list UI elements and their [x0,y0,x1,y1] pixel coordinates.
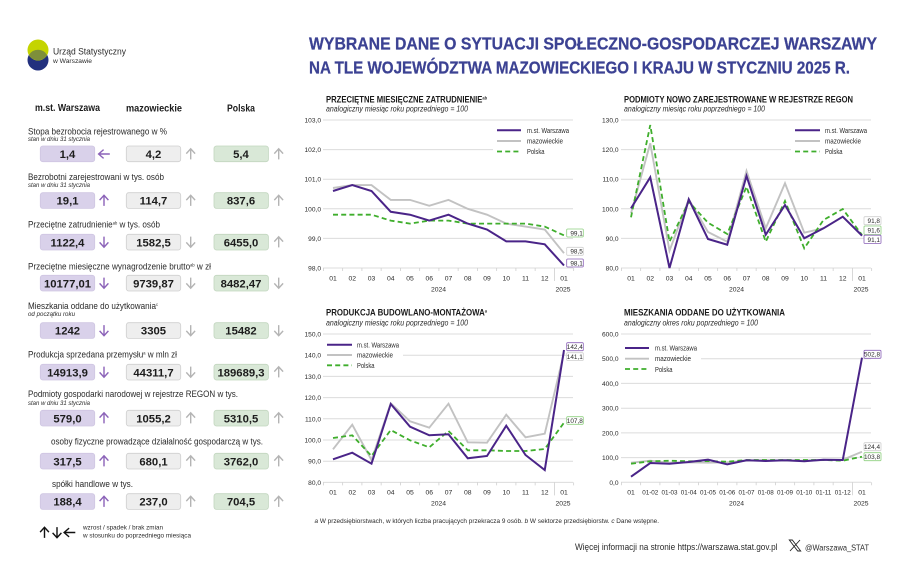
row: mieszkania oddane: c [156,302,159,307]
x axis labels: 10 [502,489,510,496]
row: bezrobotni zarejestrowani: stan w dniu 31 stycznia [28,182,91,189]
x axis labels: 01-11 [816,489,832,496]
end value labels: 91,1 [868,237,880,244]
x axis labels: 03 [666,276,673,283]
row: przeciętne zatrudnienie: 6455,0 [224,237,258,249]
legend: m.st. Warszawa [825,128,867,135]
y axis labels: 101,0 [304,177,321,184]
row: produkcja sprzedana: 14913,9 [47,367,88,379]
row: wynagrodzenie brutto: w zł [195,261,211,271]
x axis labels: 01-10 [796,489,813,496]
series lines [333,185,564,266]
row: produkcja sprzedana: 44311,7 [133,367,174,379]
chart heading: MIESZKANIA ODDANE DO UŻYTKOWANIA [624,307,786,317]
legend: Polska [825,149,843,156]
chart: produkcja budowlano-montażowa [304,307,583,508]
end value labels: 99,1 [570,230,583,237]
row: bezrobotni zarejestrowani: Bezrobotni zarejestrowani w tys. osób [28,172,164,182]
row: osoby fizyczne: 3762,0 [224,456,258,468]
y axis labels: 500,0 [602,356,619,363]
legend: mazowieckie [527,138,563,146]
y axis labels: 98,0 [308,266,321,272]
y axis labels: 100,0 [304,438,321,444]
chart heading [326,307,487,327]
chart: podmioty nowo zarejestrowane [602,94,881,294]
row: mieszkania oddane: Mieszkania oddane do użytkowania [28,301,170,311]
end value labels [567,229,583,267]
end value labels [864,350,881,461]
y axis labels: 103,0 [304,118,321,124]
y axis labels [304,118,321,272]
row: stopa bezrobocia: 4,2 [146,149,161,161]
x axis labels: 01 [329,276,337,283]
x axis labels: 11 [522,489,529,496]
row: osoby fizyczne: 680,1 [139,456,168,468]
y axis labels: 130,0 [602,118,619,124]
x axis labels: 01 [560,489,568,496]
end value labels: 98,5 [570,249,583,256]
x axis labels: 12 [541,276,549,283]
y axis labels: 80,0 [308,480,321,487]
x axis labels: 02 [348,489,356,496]
end value labels: 502,8 [864,352,880,359]
x axis labels: 09 [483,276,491,283]
row: stopa bezrobocia: 5,4 [233,149,250,161]
x axis labels: 10 [800,276,808,283]
row: mieszkania oddane: 15482 [225,326,257,338]
x axis labels: 2025 [853,287,869,294]
end value labels: 103,8 [864,454,880,461]
row: wynagrodzenie brutto: 9739,87 [133,278,174,290]
row: wynagrodzenie brutto: Przeciętne miesięczne wynagrodzenie brutto [28,261,207,271]
x axis labels: 01-12 [835,489,851,496]
title [309,34,877,78]
chart heading [326,94,487,114]
x axis labels: 01-02 [642,489,659,496]
x axis labels: 05 [406,276,414,283]
y axis labels [602,118,619,272]
legend: Polska [527,149,545,156]
x axis labels: 2024 [431,287,446,294]
y axis labels: 0,0 [609,480,619,487]
x axis labels: 01 [560,276,568,283]
x axis labels: 12 [541,489,549,496]
row: stopa bezrobocia: stan w dniu 31 stycznia [28,136,91,143]
chart heading: PRZECIĘTNE MIESIĘCZNE ZATRUDNIENIE [326,94,505,104]
x axis labels: 08 [464,489,472,496]
chart heading: PRODUKCJA BUDOWLANO-MONTAŻOWA [326,307,504,317]
logo: Urząd Statystyczny w Warszawie [28,40,126,70]
column headers: mazowieckie [126,104,183,114]
row: podmioty gospodarki narodowej: stan w dniu 31 stycznia [28,400,91,407]
row: wynagrodzenie brutto: 8482,47 [221,278,261,290]
chart heading: analogiczny miesiąc roku poprzedniego = 100 [326,105,469,114]
y axis labels: 90,0 [606,236,619,243]
x axis labels: 12 [839,276,847,283]
chart heading: a [485,308,487,313]
y axis labels [602,332,619,487]
x axis labels: 01 [858,489,866,496]
legend [791,124,871,158]
row: bezrobotni zarejestrowani: 19,1 [56,196,78,208]
footer link: Więcej informacji na stronie https://warszawa.stat.gov.pl [575,541,778,552]
chart heading: analogiczny miesiąc roku poprzedniego = 100 [624,105,766,114]
arrow legend: wzrost / spadek / brak zmian [82,525,163,532]
x axis labels [627,489,869,508]
legend: Polska [357,363,375,370]
x axis labels: 2024 [729,287,744,294]
column headers [35,103,255,114]
X handle: @Warszawa_STAT [805,542,870,552]
x axis labels: 01-03 [661,489,678,496]
y axis labels: 110,0 [305,416,321,423]
x axis labels: 09 [483,489,491,496]
x axis labels: 03 [368,276,375,283]
x axis labels: 01 [858,276,866,283]
row: stopa bezrobocia: 1,4 [60,149,76,161]
end value labels: 98,1 [570,260,583,267]
x axis labels: 01-04 [681,489,697,496]
x axis labels: 01-08 [758,489,774,496]
row: podmioty gospodarki narodowej: 1055,2 [136,413,171,425]
row: mieszkania oddane: 1242 [55,326,80,338]
x axis labels: 2025 [555,501,571,508]
end value labels: 124,4 [864,444,880,451]
row: przeciętne zatrudnienie: ab [113,221,118,226]
row: bezrobotni zarejestrowani: 114,7 [140,196,167,208]
end value labels: 107,8 [567,418,583,425]
row: spółki handlowe [40,479,283,509]
x axis labels: 08 [762,276,770,283]
legend: Polska [655,367,673,374]
row: osoby fizyczne [40,436,283,469]
end value labels: 91,6 [868,228,880,235]
legend: mazowieckie [357,353,393,360]
y axis labels [304,332,321,487]
column headers: m.st. Warszawa [35,103,100,114]
row: przeciętne zatrudnienie: Przeciętne zatrudnienie [28,220,122,230]
row: przeciętne zatrudnienie: 1582,5 [136,237,171,249]
y axis labels: 110,0 [602,177,619,184]
row: produkcja sprzedana: Produkcja sprzedana przemysłu [28,350,156,360]
x axis labels: 11 [820,276,827,283]
y axis labels: 120,0 [304,395,321,402]
row: przeciętne zatrudnienie: 1122,4 [51,237,85,249]
end value labels [567,343,583,425]
y axis labels: 99,0 [308,236,321,243]
y axis labels: 100,0 [602,455,619,462]
logo: Urząd Statystyczny w Warszawie: Urząd Statystyczny [53,46,126,58]
row: produkcja sprzedana: 189689,3 [217,367,265,379]
chart heading: analogiczny miesiąc roku poprzedniego = 100 [326,318,469,327]
x axis labels: 09 [781,276,789,283]
y axis labels: 90,0 [308,459,321,466]
row: produkcja sprzedana [28,350,283,380]
row: mieszkania oddane [28,301,283,338]
footnotes: a W przedsiębiorstwach, w których liczba pracujących przekracza 9 osób. b W sektorze przedsiębiorstw. c Dane wstępne. [314,518,659,525]
panel: indicator table [28,103,283,540]
x axis labels: 04 [685,276,693,283]
x axis labels: 06 [425,489,433,496]
row: mieszkania oddane: od początku roku [28,311,76,318]
x axis labels: 2024 [431,501,446,508]
chart heading: PODMIOTY NOWO ZAREJESTROWANE W REJESTRZE REGON [624,94,853,104]
icon: X logo [789,540,801,551]
series lines [631,125,862,268]
series lines [631,358,862,477]
end value labels: 91,8 [868,218,880,225]
x axis labels: 01-06 [719,489,736,496]
row: przeciętne zatrudnienie: w tys. osób [117,220,160,230]
legend [323,338,403,371]
chart: mieszkania oddane do użytkowania [602,307,881,508]
x axis labels: 04 [387,276,395,283]
row: wynagrodzenie brutto [28,261,283,291]
x axis labels [329,489,571,508]
row: mieszkania oddane: 3305 [141,326,166,338]
x axis labels: 04 [387,489,395,496]
x axis labels: 07 [445,276,452,283]
row: spółki handlowe: 188,4 [53,497,82,509]
y axis labels: 102,0 [304,147,321,154]
y axis labels: 140,0 [304,353,321,360]
x axis labels: 2025 [555,287,571,294]
x axis labels: 01 [627,276,635,283]
arrow legend [40,525,191,540]
x axis labels: 02 [646,276,654,283]
x axis labels: 03 [368,489,375,496]
legend: m.st. Warszawa [655,346,697,352]
legend: m.st. Warszawa [527,128,569,135]
arrow legend: w stosunku do poprzedniego miesiąca [82,532,191,540]
row: podmioty gospodarki narodowej: 579,0 [53,413,82,425]
y axis labels: 100,0 [602,206,619,213]
x axis labels: 08 [464,276,472,283]
end value labels: 141,1 [567,354,583,361]
row: spółki handlowe: spółki handlowe w tys. [52,479,133,489]
chart heading [624,94,853,114]
y axis labels: 100,0 [304,206,321,213]
row: przeciętne zatrudnienie [28,220,283,250]
x axis labels [627,276,869,294]
row: podmioty gospodarki narodowej: Podmioty gospodarki narodowej w rejestrze REGON w tys. [28,389,238,399]
row: podmioty gospodarki narodowej [28,389,283,426]
x axis labels: 11 [522,276,529,283]
end value labels: 142,4 [567,344,583,351]
x axis labels: 01 [329,489,337,496]
y axis labels: 600,0 [602,332,619,338]
row: bezrobotni zarejestrowani: 837,6 [227,196,255,208]
end value labels [864,217,881,244]
x axis labels: 01-09 [777,489,794,496]
chart heading: ab [482,95,487,100]
row: wynagrodzenie brutto: ab [190,262,195,267]
legend [621,342,701,374]
legend [493,124,573,158]
x axis labels: 01-07 [738,489,755,496]
x axis labels: 07 [743,276,750,283]
x axis labels: 10 [502,276,510,283]
row: produkcja sprzedana: a [143,351,146,356]
chart: przeciętne miesięczne zatrudnienie [304,94,583,294]
chart heading: analogiczny okres roku poprzedniego = 100 [624,318,759,327]
x axis labels: 02 [348,276,356,283]
row: osoby fizyczne: 317,5 [53,456,82,468]
row: stopa bezrobocia [28,126,283,162]
x axis labels: 2025 [853,501,869,508]
y axis labels: 80,0 [606,266,619,272]
x axis labels: 2024 [729,501,744,508]
y axis labels: 130,0 [304,374,321,381]
row: stopa bezrobocia: Stopa bezrobocia rejestrowanego w % [28,126,167,136]
row: spółki handlowe: 237,0 [139,497,168,509]
x axis labels: 06 [425,276,433,283]
row: wynagrodzenie brutto: 10177,01 [44,278,91,290]
x axis labels: 01 [627,489,635,496]
series lines [333,350,564,470]
logo: Urząd Statystyczny w Warszawie: w Warszawie [52,58,92,65]
y axis labels: 150,0 [304,332,321,338]
y axis labels: 120,0 [602,147,619,154]
x axis labels: 05 [704,276,712,283]
row: podmioty gospodarki narodowej: 5310,5 [224,413,258,425]
x axis labels: 06 [723,276,731,283]
row: osoby fizyczne: osoby fizyczne prowadzące działalność gospodarczą w tys. [51,436,263,446]
legend: m.st. Warszawa [357,342,399,349]
y axis labels: 400,0 [602,381,619,388]
x axis labels [329,276,571,294]
x axis labels: 07 [445,489,452,496]
x axis labels: 01-05 [700,489,717,496]
row: produkcja sprzedana: w mln zł [145,350,177,360]
chart heading [624,307,786,327]
y axis labels: 200,0 [602,430,619,437]
column headers: Polska [227,104,255,114]
row: bezrobotni zarejestrowani [28,172,283,208]
x axis labels: 05 [406,489,414,496]
legend: mazowieckie [825,138,861,146]
legend: mazowieckie [655,356,691,363]
y axis labels: 300,0 [602,406,619,413]
row: spółki handlowe: 704,5 [227,497,255,509]
